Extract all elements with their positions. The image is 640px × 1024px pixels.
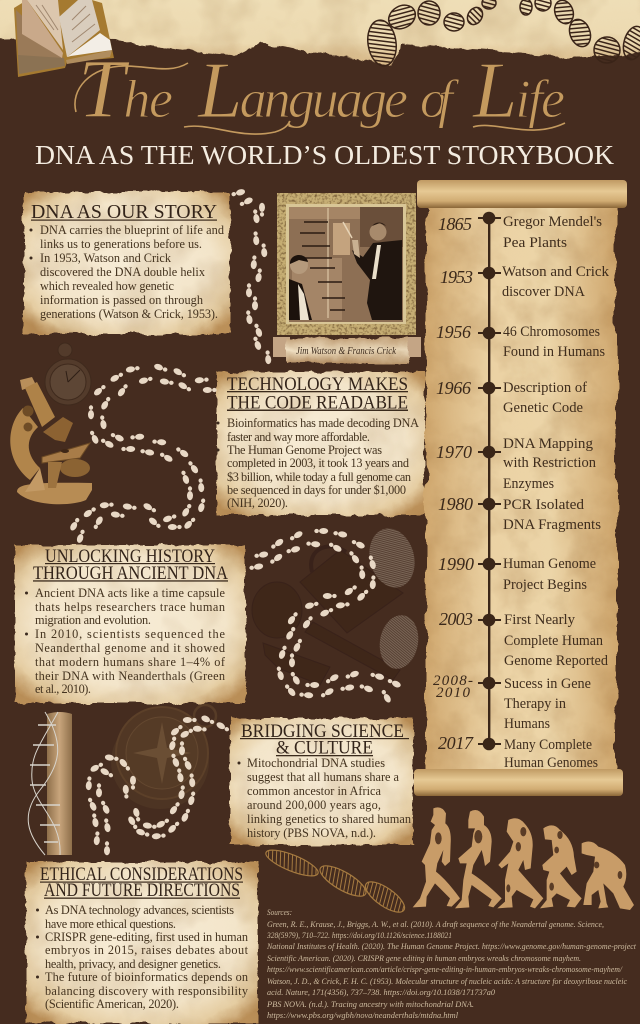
bullet text: health, privacy, and designer genetics.: [45, 957, 221, 971]
bullet text: Neanderthal genome and it showed: [35, 641, 225, 655]
bullet text: around 200,000 years ago,: [247, 798, 381, 812]
bullet text: et al., 2010).: [35, 682, 91, 696]
scroll body: [426, 200, 616, 774]
bullet text: CRISPR gene-editing, first used in human: [45, 930, 248, 944]
bullet text: generations (Watson & Crick, 1953).: [40, 307, 218, 321]
bullet text: be sequenced in days for under $1,000: [227, 483, 406, 497]
icon: scroll and DNA illustration: [28, 712, 72, 855]
icon: compass: [111, 705, 216, 809]
timeline years: 1953: [440, 267, 473, 287]
timeline years: 1865: [438, 214, 472, 234]
heading: [33, 546, 228, 584]
bullet text: The Human Genome Project was: [227, 443, 382, 457]
dark body patches: [435, 827, 622, 892]
sources: https://www.pbs.org/wgbh/nova/neanderthals/mtdna.html: [267, 1010, 459, 1020]
timeline years: 1956: [436, 322, 471, 342]
heading: AND FUTURE DIRECTIONS: [44, 880, 240, 901]
bullet text: discovered the DNA double helix: [40, 265, 205, 279]
footprint trail 1: [231, 188, 272, 364]
sources: Scientific American. (2020). CRISPR gene editing in human embryos wreaks chromosome mayhem.: [267, 953, 581, 963]
bullet text: faster and way more affordable.: [227, 430, 370, 444]
bullet text: Bioinformatics has made decoding DNA: [227, 416, 419, 430]
timeline events: Found in Humans: [503, 344, 605, 360]
bullet text: migration and evolution.: [35, 613, 151, 627]
timeline years: 2017: [438, 733, 474, 753]
timeline events: Therapy in: [504, 696, 567, 712]
heading: BRIDGING SCIENCE: [241, 721, 404, 742]
timeline axis: [478, 212, 501, 750]
heading: THROUGH ANCIENT DNA: [33, 563, 228, 584]
figure 2: [455, 810, 502, 908]
panel: ethical considerations and future directions: [26, 862, 258, 1023]
sources: Sources:: [267, 907, 292, 917]
timeline events: Description of: [503, 380, 587, 396]
panel: bridging science and culture: [230, 718, 413, 845]
title: [75, 43, 565, 136]
framed photo of Watson and Crick: [277, 193, 416, 335]
panel: unlocking history through ancient DNA: [15, 545, 245, 703]
bullet text: In 2010, scientists sequenced the: [35, 627, 226, 641]
timeline events: Watson and Crick: [502, 264, 610, 280]
bullet text: have more ethical questions.: [45, 917, 176, 931]
bullet text: As DNA technology advances, scientists: [45, 903, 234, 917]
panel: DNA as our story: [24, 192, 230, 334]
timeline years: 1990: [438, 554, 474, 574]
timeline events: Genome Reported: [504, 653, 609, 669]
timeline events: DNA Fragments: [503, 517, 601, 533]
timeline events: Complete Human: [504, 633, 604, 649]
figure 5: [582, 841, 634, 910]
icon: DNA strand top right: [365, 0, 640, 68]
footprint trail 2: [69, 363, 217, 544]
timeline events: Project Begins: [503, 577, 587, 593]
heading: DNA AS OUR STORY: [31, 201, 217, 223]
heading: ETHICAL CONSIDERATIONS: [40, 864, 243, 885]
timeline events: Pea Plants: [503, 235, 567, 251]
bullet text: embryos in 2015, raises debates about: [45, 943, 249, 957]
timeline years: 1966: [436, 378, 471, 398]
bullet text: The future of bioinformatics depends on: [45, 970, 248, 984]
bullet text: thats helps researchers trace human: [35, 600, 225, 614]
figure 1: [413, 807, 460, 907]
bullet text: common ancestor in Africa: [247, 784, 382, 798]
title: Life: [472, 47, 565, 135]
timeline events: [502, 214, 610, 771]
bottom roller: [414, 769, 623, 796]
bullet text: [216, 416, 419, 510]
icon: gold DNA helix: [263, 845, 409, 918]
heading: THE CODE READABLE: [227, 392, 408, 414]
icon: fingerprints: [363, 523, 422, 672]
bullet text: which revealed how genetic: [40, 279, 175, 293]
timeline events: Sucess in Gene: [504, 676, 591, 692]
heading: UNLOCKING HISTORY: [45, 546, 215, 567]
title: The: [78, 43, 173, 136]
timeline years: 2003: [439, 609, 473, 629]
timeline events: DNA Mapping: [503, 436, 594, 452]
bullet text: linking genetics to shared human: [247, 812, 411, 826]
icon: key and padlock: [252, 546, 403, 685]
footprint trail 4: [85, 714, 230, 855]
timeline events: First Nearly: [504, 612, 576, 628]
timeline events: discover DNA: [502, 284, 585, 300]
icon: human evolution silhouettes: [413, 807, 634, 910]
bullet text: (Scientific American, 2020).: [45, 997, 179, 1011]
heading: [40, 864, 243, 901]
sources: acid. Nature, 171(4356), 737–738. https://doi.org/10.1038/171737a0: [267, 987, 496, 997]
bullet text: (NIH, 2020).: [227, 496, 288, 510]
sources: [266, 907, 636, 1020]
timeline events: Enzymes: [503, 476, 554, 492]
icon: open book: [14, 0, 114, 77]
bullet text: $3 billion, while today a full genome can: [227, 470, 411, 484]
bullet text: In 1953, Watson and Crick: [40, 251, 172, 265]
ornate frame: [277, 193, 416, 335]
heading: [240, 721, 409, 758]
sources: PBS NOVA. (n.d.). Tracing ancestry with mitochondrial DNA.: [266, 999, 474, 1009]
bullet text: [25, 586, 226, 696]
sources: 328(5979), 710–722. https://doi.org/10.1126/science.1188021: [266, 930, 452, 940]
bullet text: balancing discovery with responsibility: [45, 984, 249, 998]
timeline years: 2008-: [433, 673, 473, 689]
panel: technology makes the code readable: [216, 372, 424, 515]
timeline years: 1980: [438, 494, 473, 514]
timeline events: Human Genome: [503, 556, 596, 572]
sources: Green, R. E., Krause, J., Briggs, A. W., et al. (2010). A draft sequence of the Neandertal genome. Science,: [267, 919, 604, 929]
photo: [289, 207, 403, 322]
subtitle: DNA AS THE WORLD’S OLDEST STORYBOOK: [35, 140, 615, 170]
timeline events: Gregor Mendel's: [503, 214, 602, 230]
heading: & CULTURE: [276, 738, 373, 758]
title: Language: [197, 47, 408, 135]
heading: TECHNOLOGY MAKES: [227, 374, 408, 395]
bullet text: links us to generations before us.: [40, 237, 202, 251]
timeline events: with Restriction: [503, 455, 597, 471]
title: of: [420, 69, 460, 129]
banner caption: Jim Watson & Francis Crick: [296, 346, 396, 357]
banner caption: [273, 337, 421, 363]
timeline events: 46 Chromosomes: [503, 324, 600, 340]
bullet text: history (PBS NOVA, n.d.).: [247, 826, 376, 840]
top roller: [417, 180, 627, 208]
bullet text: that modern humans share 1–4% of: [35, 655, 226, 669]
icon: pocket watch: [45, 343, 91, 405]
timeline events: PCR Isolated: [503, 497, 585, 513]
bullet text: completed in 2003, it took 13 years and: [227, 456, 409, 470]
timeline events: Humans: [504, 716, 550, 732]
timeline years: 1970: [436, 442, 472, 462]
heading: [227, 374, 408, 414]
bullet text: [30, 223, 224, 321]
timeline events: Genetic Code: [503, 400, 583, 416]
timeline years: 2010: [436, 685, 470, 701]
bullet text: suggest that all humans share a: [247, 770, 400, 784]
bullet text: their DNA with Neanderthals (Green: [35, 669, 225, 683]
panel: timeline scroll: [414, 180, 627, 796]
figure 4: [540, 825, 582, 908]
bullet text: [36, 903, 249, 1011]
bullet text: Ancient DNA acts like a time capsule: [35, 586, 226, 600]
bullet text: Mitochondrial DNA studies: [247, 756, 385, 770]
bullet text: information is passed on through: [40, 293, 203, 307]
bullet text: [238, 756, 411, 840]
figure 3: [497, 818, 543, 908]
torn paper header: [0, 0, 640, 65]
timeline events: Human Genomes: [504, 755, 598, 771]
timeline years: [433, 214, 474, 753]
timeline events: Many Complete: [504, 737, 592, 753]
footprint trail 3: [249, 528, 402, 704]
bullet text: DNA carries the blueprint of life and: [40, 223, 224, 237]
icon: microscope: [10, 377, 92, 504]
